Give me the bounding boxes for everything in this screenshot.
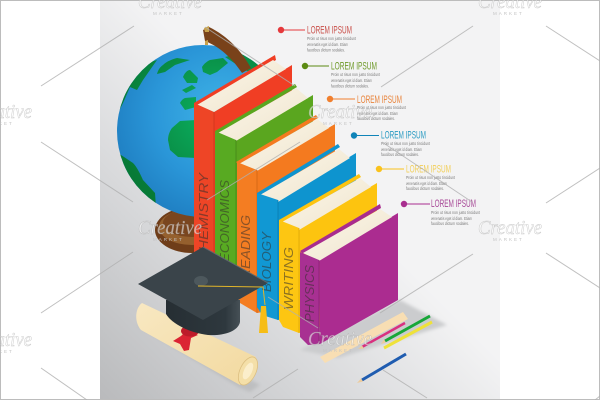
label: item 1: venenatis eget id diam. Etiam xyxy=(307,42,348,48)
label: item 2: faucibus dictum sodales. xyxy=(331,84,369,90)
book: chemistry: CHEMISTRY xyxy=(196,171,211,262)
book: economics xyxy=(215,84,313,270)
watermark: logos: Creative xyxy=(478,217,542,239)
label: item 5: Proin ut risus non justo tincidunt xyxy=(406,175,455,181)
label: item 3: LOREM IPSUM xyxy=(357,94,402,106)
pencil: yellow xyxy=(384,322,432,348)
icon: globe xyxy=(117,26,263,253)
watermark: logos xyxy=(0,0,542,354)
label: item 1: LOREM IPSUM xyxy=(307,24,352,36)
label: item 6 xyxy=(401,198,480,227)
label: item 3 xyxy=(327,94,406,122)
pencil: green xyxy=(381,316,430,344)
label: item 6: faucibus dictum sodales. xyxy=(431,221,469,227)
watermark: logos: MARKET xyxy=(323,348,354,353)
label: item 1: Proin ut risus non justo tincidunt xyxy=(307,36,356,42)
label: item 6: Proin ut risus non justo tincidunt xyxy=(431,210,480,216)
book: chemistry xyxy=(194,55,292,262)
label: item 3: venenatis eget id diam. Etiam xyxy=(357,111,398,117)
label: item 5 xyxy=(376,164,455,192)
label: item 2 xyxy=(302,60,380,90)
watermark: logos: Creative xyxy=(138,217,202,239)
label: item 3: Proin ut risus non justo tincidunt xyxy=(357,105,406,111)
scroll diploma xyxy=(136,303,262,392)
pencil: pink xyxy=(358,323,405,349)
book: writing xyxy=(279,174,377,333)
book: physics: PHYSICS xyxy=(302,265,317,322)
watermark: logos: MARKET xyxy=(323,121,354,126)
icon: graduation cap xyxy=(138,247,268,335)
book: economics: ECONOMICS xyxy=(217,180,232,262)
label: item 5: LOREM IPSUM xyxy=(406,164,451,176)
wax seal xyxy=(173,326,199,351)
tassel xyxy=(259,306,268,333)
label: item 2: venenatis eget id diam. Etiam xyxy=(331,78,372,84)
watermark: logos: MARKET xyxy=(493,11,524,16)
book: physics xyxy=(300,204,398,345)
ruler xyxy=(320,312,408,363)
label: item 1: faucibus dictum sodales. xyxy=(307,48,345,54)
book: reading: READING xyxy=(238,215,253,279)
label: item 4: faucibus dictum sodales. xyxy=(381,152,419,158)
label: item 4 xyxy=(351,130,430,158)
watermark: logos: MARKET xyxy=(153,11,184,16)
pencil: blue xyxy=(357,354,406,383)
watermark: logos: MARKET xyxy=(493,237,524,242)
watermark: logos: MARKET xyxy=(153,237,184,242)
label: item 5: faucibus dictum sodales. xyxy=(406,186,444,192)
label: item 4: LOREM IPSUM xyxy=(381,130,426,142)
label: item 2: Proin ut risus non justo tincidunt xyxy=(331,72,380,78)
book: writing: WRITING xyxy=(281,247,296,310)
label: item 6: LOREM IPSUM xyxy=(431,198,476,210)
book: biology: BIOLOGY xyxy=(259,231,274,292)
watermark: logos: Creative xyxy=(308,101,372,123)
label: item 2: LOREM IPSUM xyxy=(331,60,377,72)
label: item 3: faucibus dictum sodales. xyxy=(357,116,395,122)
watermark: logos: Creative xyxy=(308,328,372,350)
label: item 5: venenatis eget id diam. Etiam xyxy=(406,181,447,187)
label: item 6: venenatis eget id diam. Etiam xyxy=(431,216,472,222)
globe arc xyxy=(203,26,251,73)
book: biology xyxy=(257,144,356,320)
label: item 4: venenatis eget id diam. Etiam xyxy=(381,147,422,153)
label: item 1 xyxy=(278,24,356,54)
book: reading xyxy=(236,115,335,313)
label: item 4: Proin ut risus non justo tincidunt xyxy=(381,141,430,147)
